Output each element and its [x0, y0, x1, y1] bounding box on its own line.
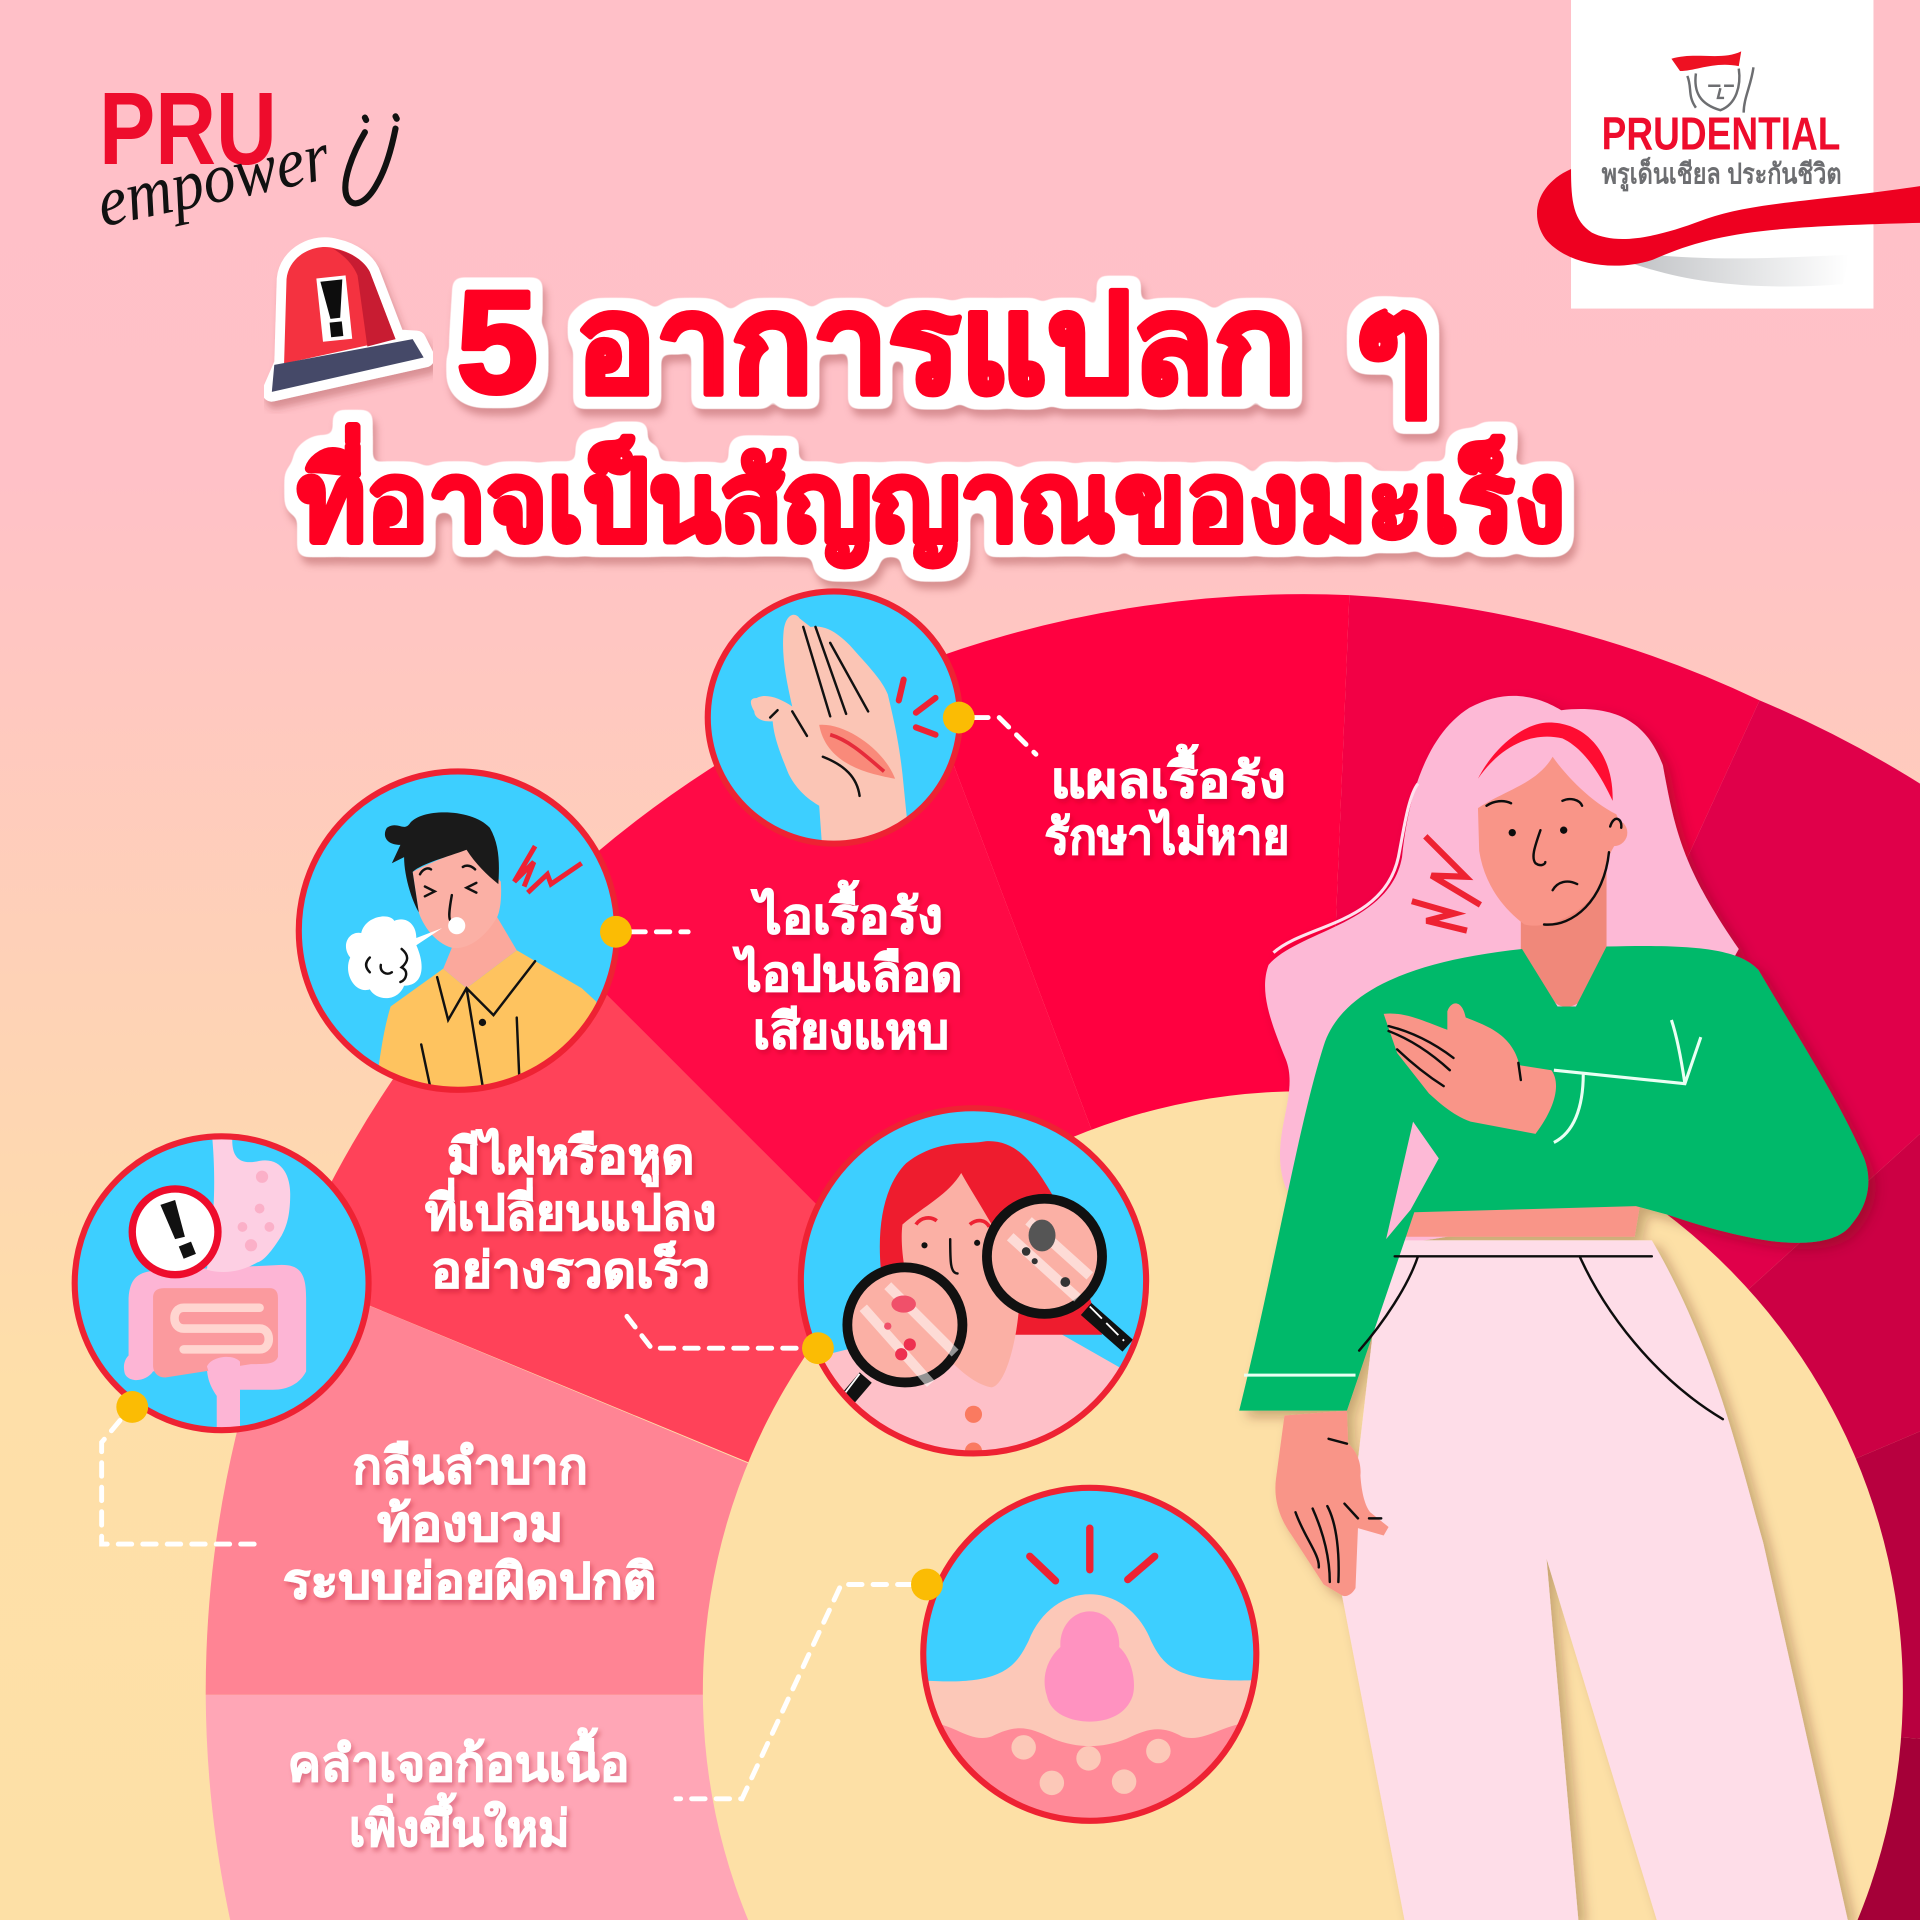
white panel: [1571, 0, 1873, 309]
label: cough: [732, 880, 962, 1059]
PRUDENTIAL wordmark: PRUDENTIAL: [1602, 107, 1840, 159]
label: cough: ไอเรื้อรัง: [750, 880, 943, 944]
icon: siren: [272, 247, 425, 392]
breath cloud: [346, 916, 442, 998]
skin dots: [965, 1406, 982, 1423]
sector: swallowing: [206, 1272, 1304, 1695]
title line 1: 5: [457, 261, 538, 423]
neck: [1521, 845, 1607, 1007]
trousers: [1342, 1240, 1848, 1920]
exclamation mark: [316, 275, 352, 342]
face details: [1296, 799, 1723, 1582]
pain rays: [1030, 1528, 1155, 1581]
inner cream circle: [703, 1091, 1903, 1920]
fan chart of five symptom sectors: [206, 594, 1920, 1920]
warning badge: [132, 1189, 218, 1275]
decorative outer sectors: [1304, 595, 1920, 1920]
pylorus: [207, 1357, 240, 1396]
label: wound: รักษาไม่หาย: [1044, 807, 1289, 864]
circle border: [708, 591, 960, 844]
circle border: [75, 1136, 369, 1430]
title line 1: อาการแปลก: [576, 269, 1296, 422]
shirt: [378, 950, 596, 1087]
label: mole: ที่เปลี่ยนแปลง: [425, 1177, 716, 1240]
small intestine: [153, 1288, 278, 1378]
label: digestion: ท้องบวม: [377, 1497, 563, 1551]
dashed connector lines: [102, 718, 1036, 1799]
label: digestion: [283, 1440, 656, 1609]
hair: [880, 1141, 1102, 1335]
hair: [385, 812, 499, 912]
sector: cough: [528, 665, 1304, 1692]
face: [1478, 757, 1624, 926]
sector: mole: [289, 916, 1304, 1692]
red ribbon: [1537, 169, 1920, 266]
pain bolt: [1412, 836, 1480, 931]
stomach: [207, 1133, 290, 1272]
mouth: [448, 917, 465, 934]
circle border: [801, 1108, 1146, 1453]
tissue layer: [918, 1723, 1261, 1837]
symptom 1: hand wound circle: [708, 591, 960, 857]
label: cough: ไอปนเลือด: [732, 945, 962, 1002]
title: [298, 261, 1565, 568]
empower script: empower: [90, 117, 336, 242]
pain marks: [899, 680, 936, 735]
siren dome: [284, 247, 396, 364]
symptom 2: coughing man circle: [299, 771, 617, 1102]
logo: PRU empower U: [90, 71, 397, 242]
skin layer: [918, 1594, 1261, 1837]
white sleeve lines: [1244, 1020, 1701, 1375]
sector: wound: [916, 594, 1349, 1692]
ear: [1600, 819, 1627, 846]
wound: [819, 725, 895, 779]
large intestine: [124, 1265, 306, 1439]
headband: [1478, 722, 1613, 801]
green top: [1239, 946, 1868, 1411]
neck: [443, 917, 517, 988]
symptom 5: skin lump circle: [918, 1488, 1261, 1837]
label: digestion: กลืนลำบาก: [353, 1440, 588, 1494]
logo: Prudential panel: [1537, 0, 1920, 309]
Thai company name: พรูเด็นเชียล ประกันชีวิต: [1602, 157, 1842, 192]
circle border: [923, 1488, 1256, 1821]
hair highlight: [1273, 784, 1418, 953]
right magnifier: [1086, 1309, 1128, 1346]
face: [413, 847, 501, 948]
label: mole: [425, 1127, 716, 1298]
belly: [1406, 1200, 1641, 1237]
PRU wordmark: PRU: [99, 71, 277, 186]
lower hand: [1275, 1411, 1389, 1596]
face: [902, 1173, 1019, 1387]
label: lump: คลำเจอก้อนเนื้อ: [288, 1727, 629, 1791]
label: lump: เพิ่งขึ้นใหม่: [349, 1792, 569, 1856]
Prudence head icon: [1671, 51, 1753, 113]
chest: [824, 1334, 1120, 1450]
label: wound: แผลเรื้อรัง: [1051, 744, 1286, 808]
symptom 3: moles and magnifiers circle: [801, 1108, 1146, 1469]
hair: [1265, 696, 1739, 1242]
grey swoosh: [1622, 251, 1849, 286]
label: mole: มีไฝหรือหูด: [447, 1127, 694, 1187]
circle border: [299, 771, 617, 1090]
label: wound: [1044, 744, 1289, 864]
connector dots: [116, 702, 975, 1600]
chest hand: [1384, 1003, 1556, 1134]
open hand: [751, 615, 907, 857]
label: digestion: ระบบย่อยผิดปกติ: [283, 1555, 656, 1609]
hair gap behind arm: [1386, 1122, 1439, 1239]
siren base: [272, 339, 424, 392]
title line 2: ที่อาจเป็นสัญญาณของมะเร็ง: [298, 425, 1565, 568]
lump: [1045, 1611, 1134, 1722]
left magnifier: [838, 1378, 866, 1411]
handwritten U: [345, 116, 397, 203]
label: mole: อย่างรวดเร็ว: [431, 1240, 710, 1298]
sector: lump: [206, 1695, 1304, 1920]
label: lump: [288, 1727, 629, 1856]
title line 1: ๆ: [1354, 269, 1433, 422]
woman illustration: [1239, 696, 1868, 1920]
pain bolts: [514, 846, 582, 893]
label: cough: เสียงแหบ: [753, 1005, 949, 1059]
symptom 4: digestive system circle: [75, 1133, 369, 1439]
